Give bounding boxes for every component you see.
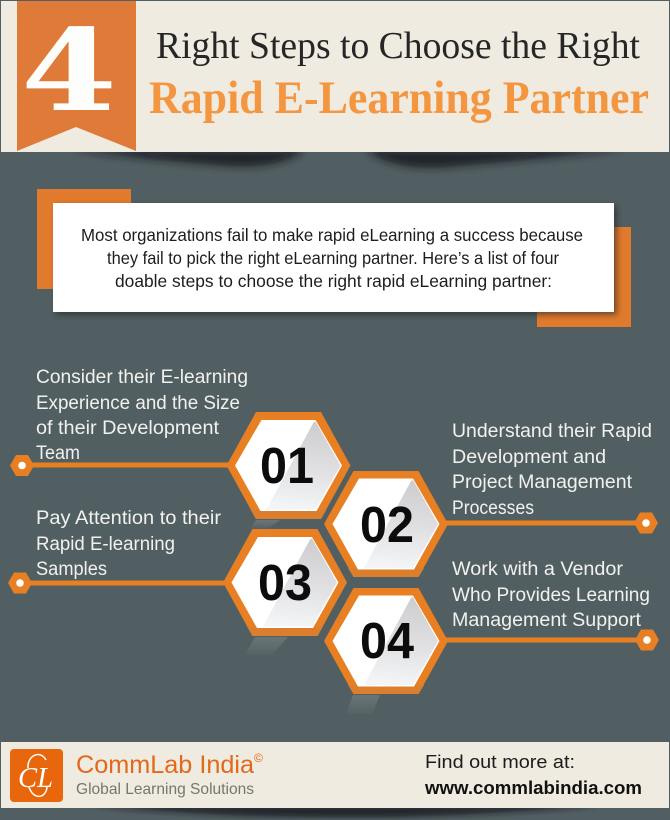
footer shadow: [90, 806, 600, 817]
brand name: CommLab India: [76, 751, 254, 779]
step 1 text: [36, 367, 248, 464]
step 4 connector: [445, 630, 659, 650]
hexagon 03: [223, 529, 347, 636]
step 2 text: Processes: [452, 498, 534, 519]
step 3 text: Pay Attention to their: [36, 508, 222, 529]
big number 4: 4: [21, 4, 117, 137]
intro text: Most organizations fail to make rapid eLearning a success because: [81, 225, 583, 245]
copyright mark: ©: [254, 751, 263, 765]
footer band: [1, 742, 669, 808]
header banner: [1, 1, 669, 152]
tagline: Global Learning Solutions: [76, 781, 254, 798]
hexagon reflections: [245, 520, 380, 714]
step 1 text: of their Development: [36, 418, 220, 439]
intro panel: [37, 189, 631, 327]
hexagon 03: 03: [258, 554, 312, 611]
hexagon 04: 04: [360, 612, 415, 669]
step 3 connector: [8, 572, 226, 594]
ribbon: [17, 1, 136, 151]
orange square top left: [37, 189, 131, 289]
title line 1: Right Steps to Choose the Right: [156, 25, 640, 67]
step 4 text: [452, 559, 650, 631]
website url: www.commlabindia.com: [424, 777, 642, 798]
step 1 text: Team: [36, 443, 80, 464]
step 1 text: Experience and the Size: [36, 393, 240, 414]
hexagon 02: 02: [360, 496, 414, 553]
header shadow: [70, 150, 625, 168]
title line 2: Rapid E-Learning Partner: [149, 72, 649, 124]
step 2 text: Understand their Rapid: [452, 421, 652, 442]
step 4 text: Who Provides Learning: [452, 585, 650, 606]
orange square bottom right: [537, 227, 631, 327]
find out more: Find out more at:: [425, 751, 575, 772]
hexagon 04: [324, 588, 448, 694]
icon: CommLab logo: [10, 749, 63, 802]
step 3 text: [36, 508, 222, 580]
hexagon 01: [226, 412, 350, 519]
step 3 text: Samples: [36, 559, 107, 580]
step 2 text: Project Management: [452, 472, 633, 493]
step 2 text: Development and: [452, 447, 606, 468]
step 3 text: Rapid E-learning: [36, 534, 175, 555]
intro text: [81, 225, 583, 291]
hexagon 02: [324, 471, 448, 577]
white box: [53, 203, 614, 312]
intro text: they fail to pick the right eLearning partner. Here’s a list of four: [107, 248, 559, 268]
icon: CommLab logo: CL: [18, 762, 53, 794]
step 4 text: Work with a Vendor: [452, 559, 624, 580]
step 4 text: Management Support: [452, 610, 642, 631]
step 2 text: [452, 421, 652, 519]
step 1 text: Consider their E-learning: [36, 367, 248, 388]
step 2 connector: [445, 512, 658, 534]
step 1 connector: [10, 455, 230, 476]
intro text: doable steps to choose the right rapid eLearning partner:: [115, 271, 552, 291]
hexagon 01: 01: [260, 437, 314, 494]
white box shadow: [56, 206, 617, 315]
